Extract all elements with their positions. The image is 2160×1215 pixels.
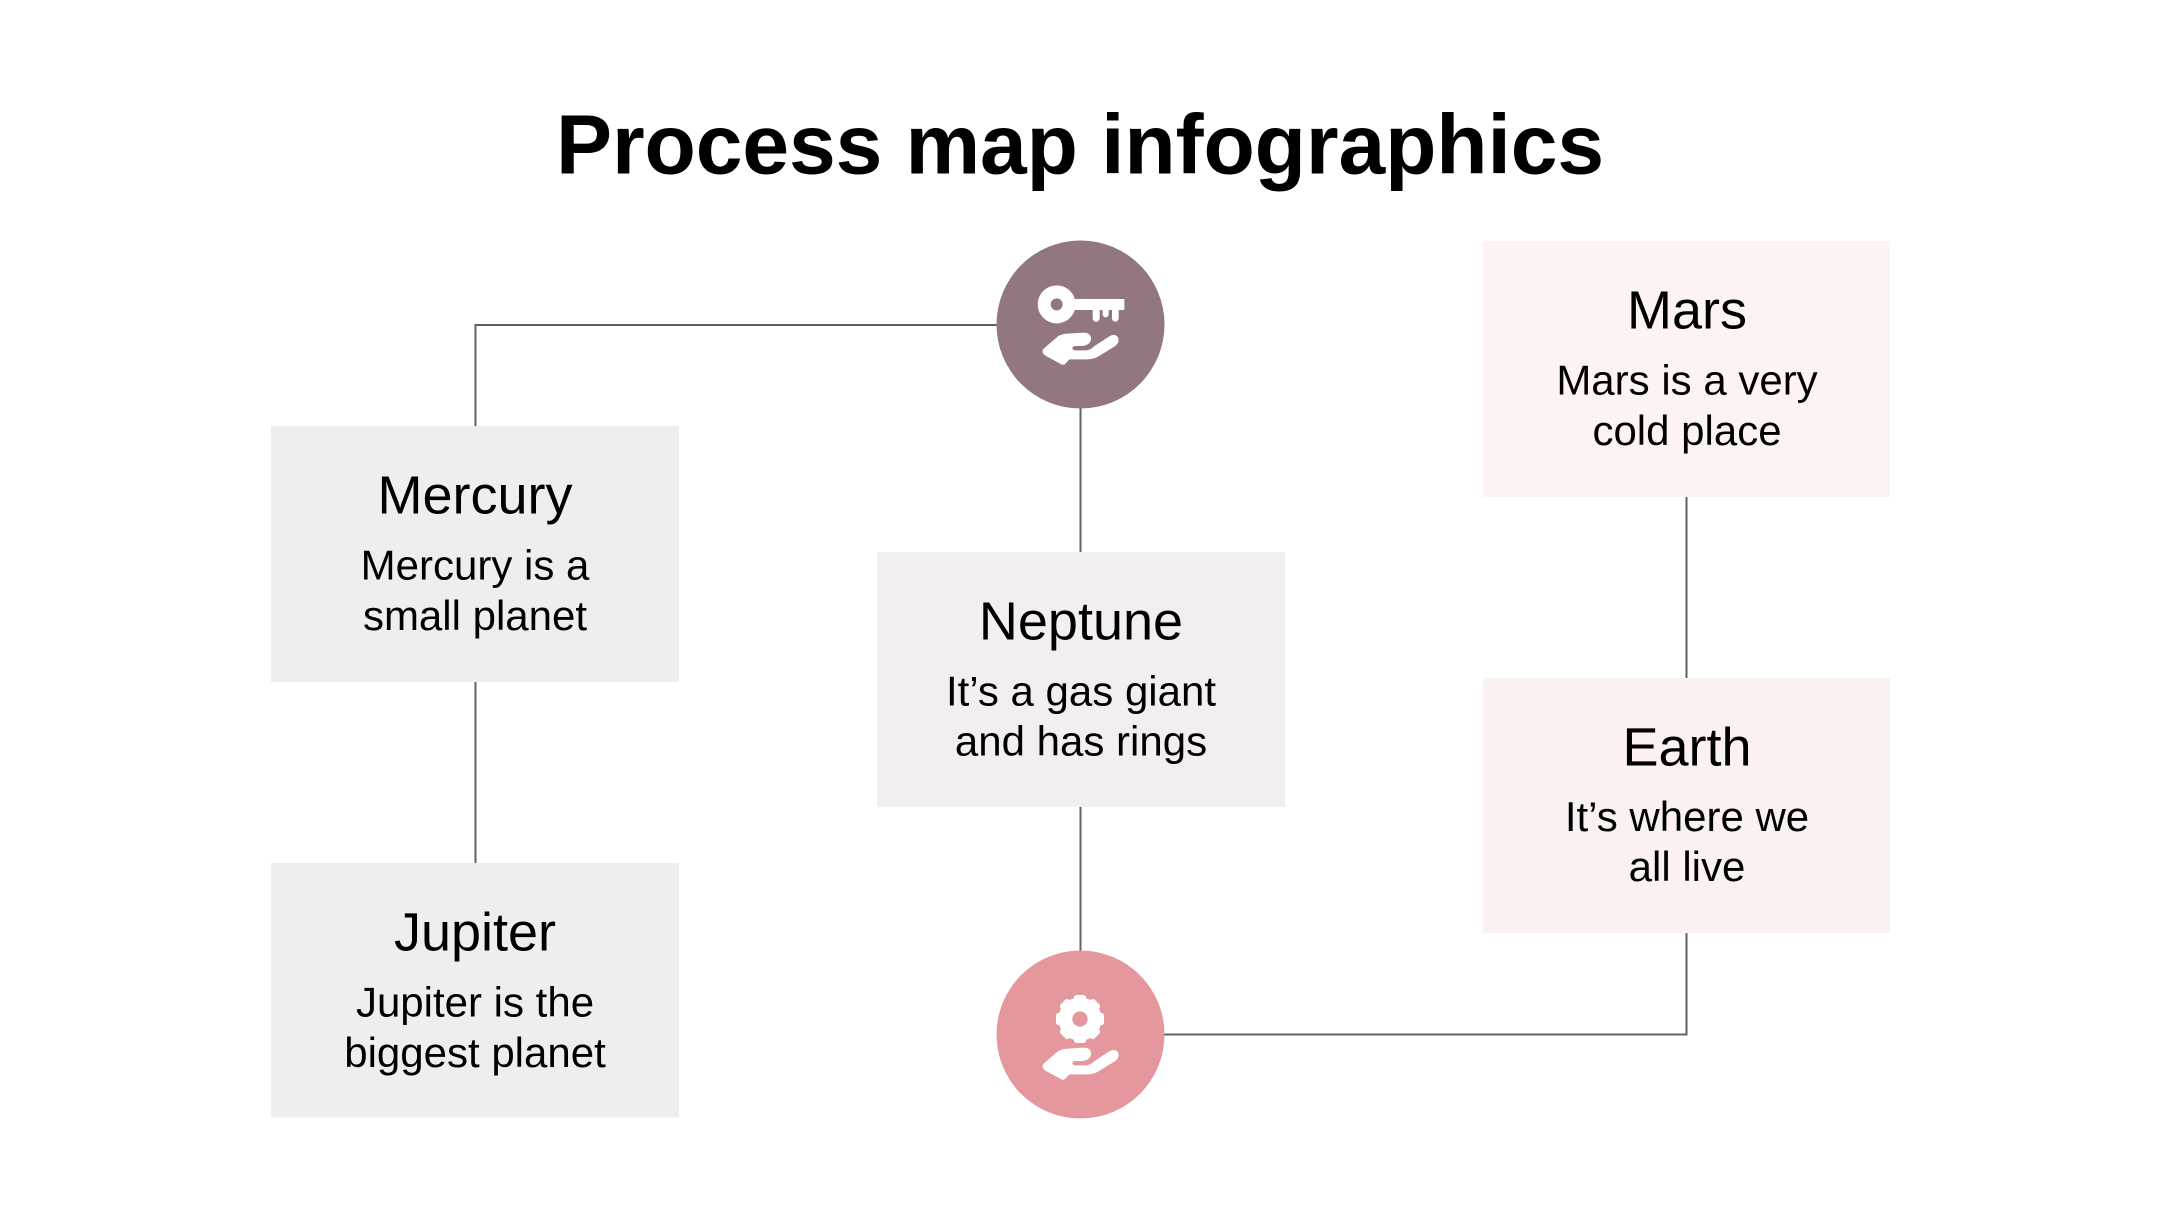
text: Jupiter description: biggest planet (344, 1029, 606, 1076)
text: Earth description: It’s where we (1565, 793, 1809, 840)
panel: Neptune (877, 552, 1285, 807)
connector: Neptune to gear circle (1080, 807, 1082, 951)
heading: Mercury: Mercury (377, 466, 573, 526)
heading: Mars: Mars (1627, 281, 1747, 341)
panel: Mercury (271, 426, 679, 682)
connector: gear circle to Earth (1164, 933, 1686, 1034)
heading: Neptune: Neptune (979, 591, 1183, 651)
text: Neptune description: It’s a gas giant (946, 667, 1216, 714)
connector: Mercury to Jupiter (474, 682, 476, 863)
text: Mercury description: small planet (363, 592, 587, 639)
title: Process map infographics (556, 97, 1604, 191)
panel: Earth (1483, 678, 1890, 933)
connector: key circle to Mercury (476, 325, 997, 426)
panel: Mars (1483, 241, 1890, 497)
panel: Jupiter (271, 863, 679, 1118)
text: Neptune description: and has rings (955, 718, 1207, 765)
heading: Jupiter: Jupiter (394, 903, 556, 963)
connector: key circle to Neptune (1080, 408, 1082, 552)
text: Mars description: Mars is a very (1556, 357, 1818, 404)
text: Mercury description: Mercury is a (361, 542, 589, 589)
icon: gear in hand (996, 950, 1164, 1118)
connector: Earth to Mars (1686, 497, 1688, 678)
icon: key in hand (996, 240, 1164, 408)
heading: Earth: Earth (1622, 717, 1752, 777)
text: Mars description: cold place (1592, 407, 1782, 454)
text: Earth description: all live (1629, 843, 1745, 890)
text: Jupiter description: Jupiter is the (356, 979, 594, 1026)
